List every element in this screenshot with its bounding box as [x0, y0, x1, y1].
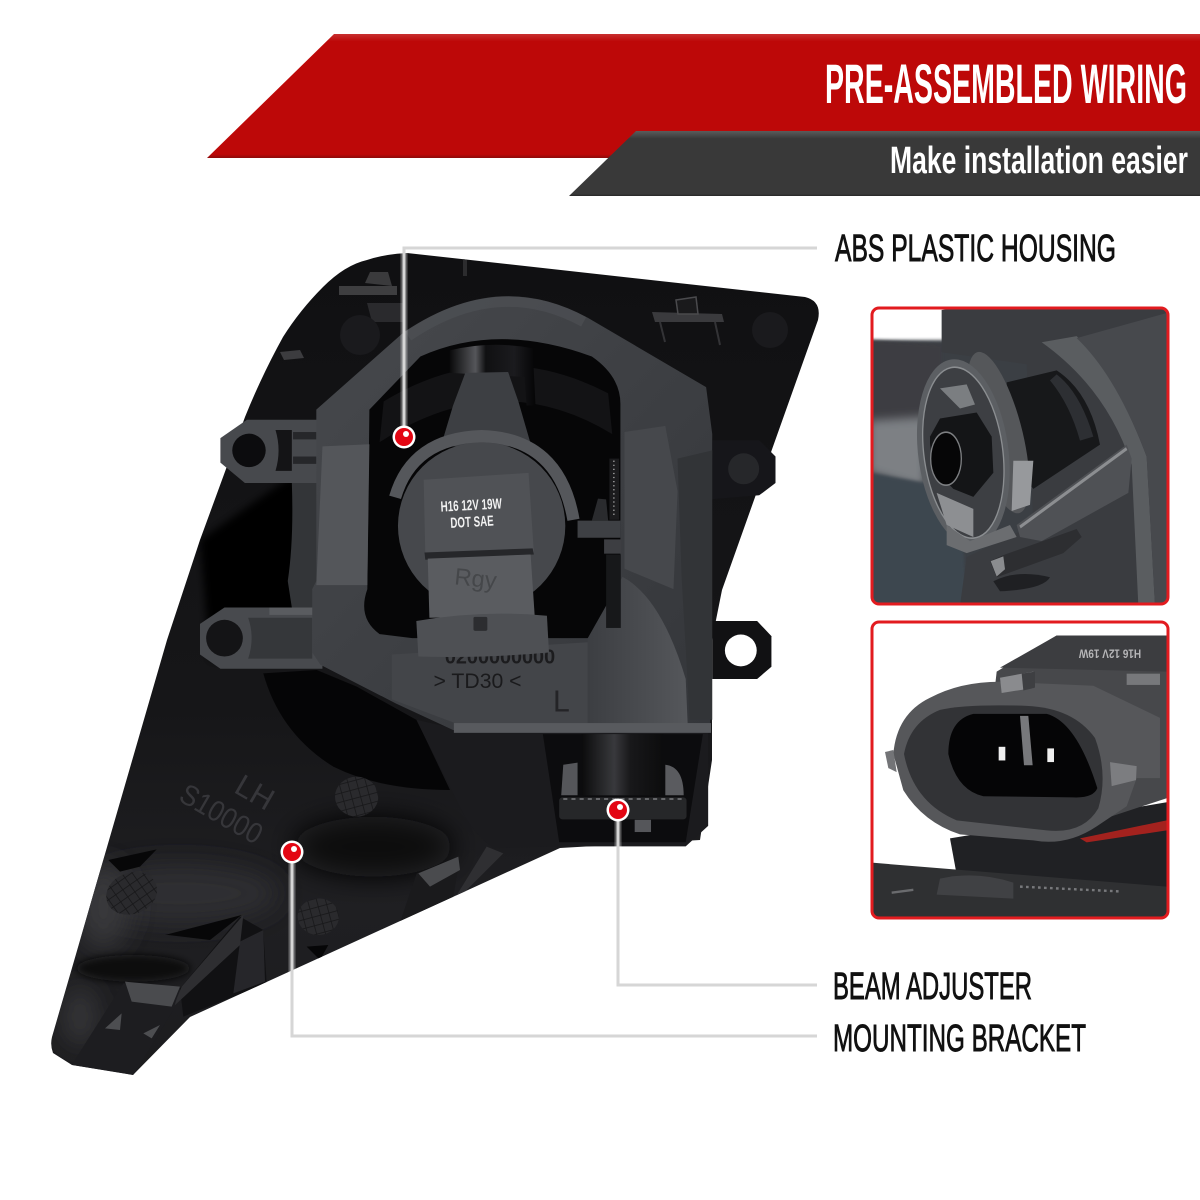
housing embossing: > TD30 < [434, 670, 522, 693]
right lug [710, 440, 776, 499]
connector [416, 554, 549, 657]
mesh circles [106, 872, 157, 914]
lower housing facet [588, 577, 688, 726]
leader line: beam adjuster [618, 810, 817, 985]
connector between ears [288, 483, 318, 608]
triangular recesses [108, 849, 157, 872]
bulb stem [441, 372, 531, 446]
banner: red title band [207, 34, 1200, 158]
housing embossing: L [553, 686, 570, 719]
lighter lower shading [80, 863, 280, 923]
inset border [872, 622, 1168, 918]
label: beam adjuster: BEAM ADJUSTER [833, 966, 1032, 1008]
leader line: mounting bracket [292, 852, 817, 1036]
housing embossing: 0200000000 [445, 646, 555, 668]
lower left mounting ear [200, 608, 322, 669]
window [364, 339, 620, 638]
bottom adjuster [543, 734, 703, 842]
lower dark shell [416, 720, 708, 848]
label block: DOT SAE [450, 514, 494, 532]
main housing [312, 296, 712, 732]
bulb top cap [450, 345, 536, 406]
right tab [400, 872, 454, 921]
marker: housing [392, 426, 416, 448]
label block: H16 12V 19W [440, 496, 502, 516]
ribs [180, 917, 267, 1017]
product: fog light rear view [51, 253, 819, 1075]
right pillar [624, 426, 678, 589]
back plate [51, 253, 819, 1075]
left pillar [316, 444, 369, 585]
inset: connector close-up: H16 12V 19W [1078, 646, 1141, 659]
banner: dark subtitle band [569, 131, 1200, 196]
inset: connector close-up [870, 619, 1170, 921]
retaining band [395, 436, 573, 520]
back plate: LH [229, 768, 280, 817]
lower body plate [392, 642, 588, 726]
adjuster screw [578, 459, 621, 628]
marker: bracket [280, 840, 304, 864]
bulb body [398, 442, 565, 610]
inset border [872, 308, 1168, 604]
lens bowl crescent [263, 670, 450, 790]
housing (source coords scaled) [200, 296, 776, 848]
upper left mounting ear [220, 420, 322, 483]
housing top edge highlight [408, 301, 584, 336]
reflector inner shade [380, 366, 612, 442]
bottom tab [72, 983, 180, 1075]
upper plate clips [339, 286, 397, 295]
housing embossing [434, 646, 570, 719]
connector: Rgy [453, 564, 498, 595]
marker: adjuster [606, 798, 630, 822]
inset: adjuster close-up [870, 306, 1170, 605]
plate text: S10000 [174, 777, 268, 851]
leader line: ABS plastic housing [404, 248, 817, 437]
lower right lug with hole [712, 621, 771, 679]
label block [424, 473, 534, 560]
upper area black behind ears [196, 483, 292, 620]
bottom lip [454, 723, 711, 733]
